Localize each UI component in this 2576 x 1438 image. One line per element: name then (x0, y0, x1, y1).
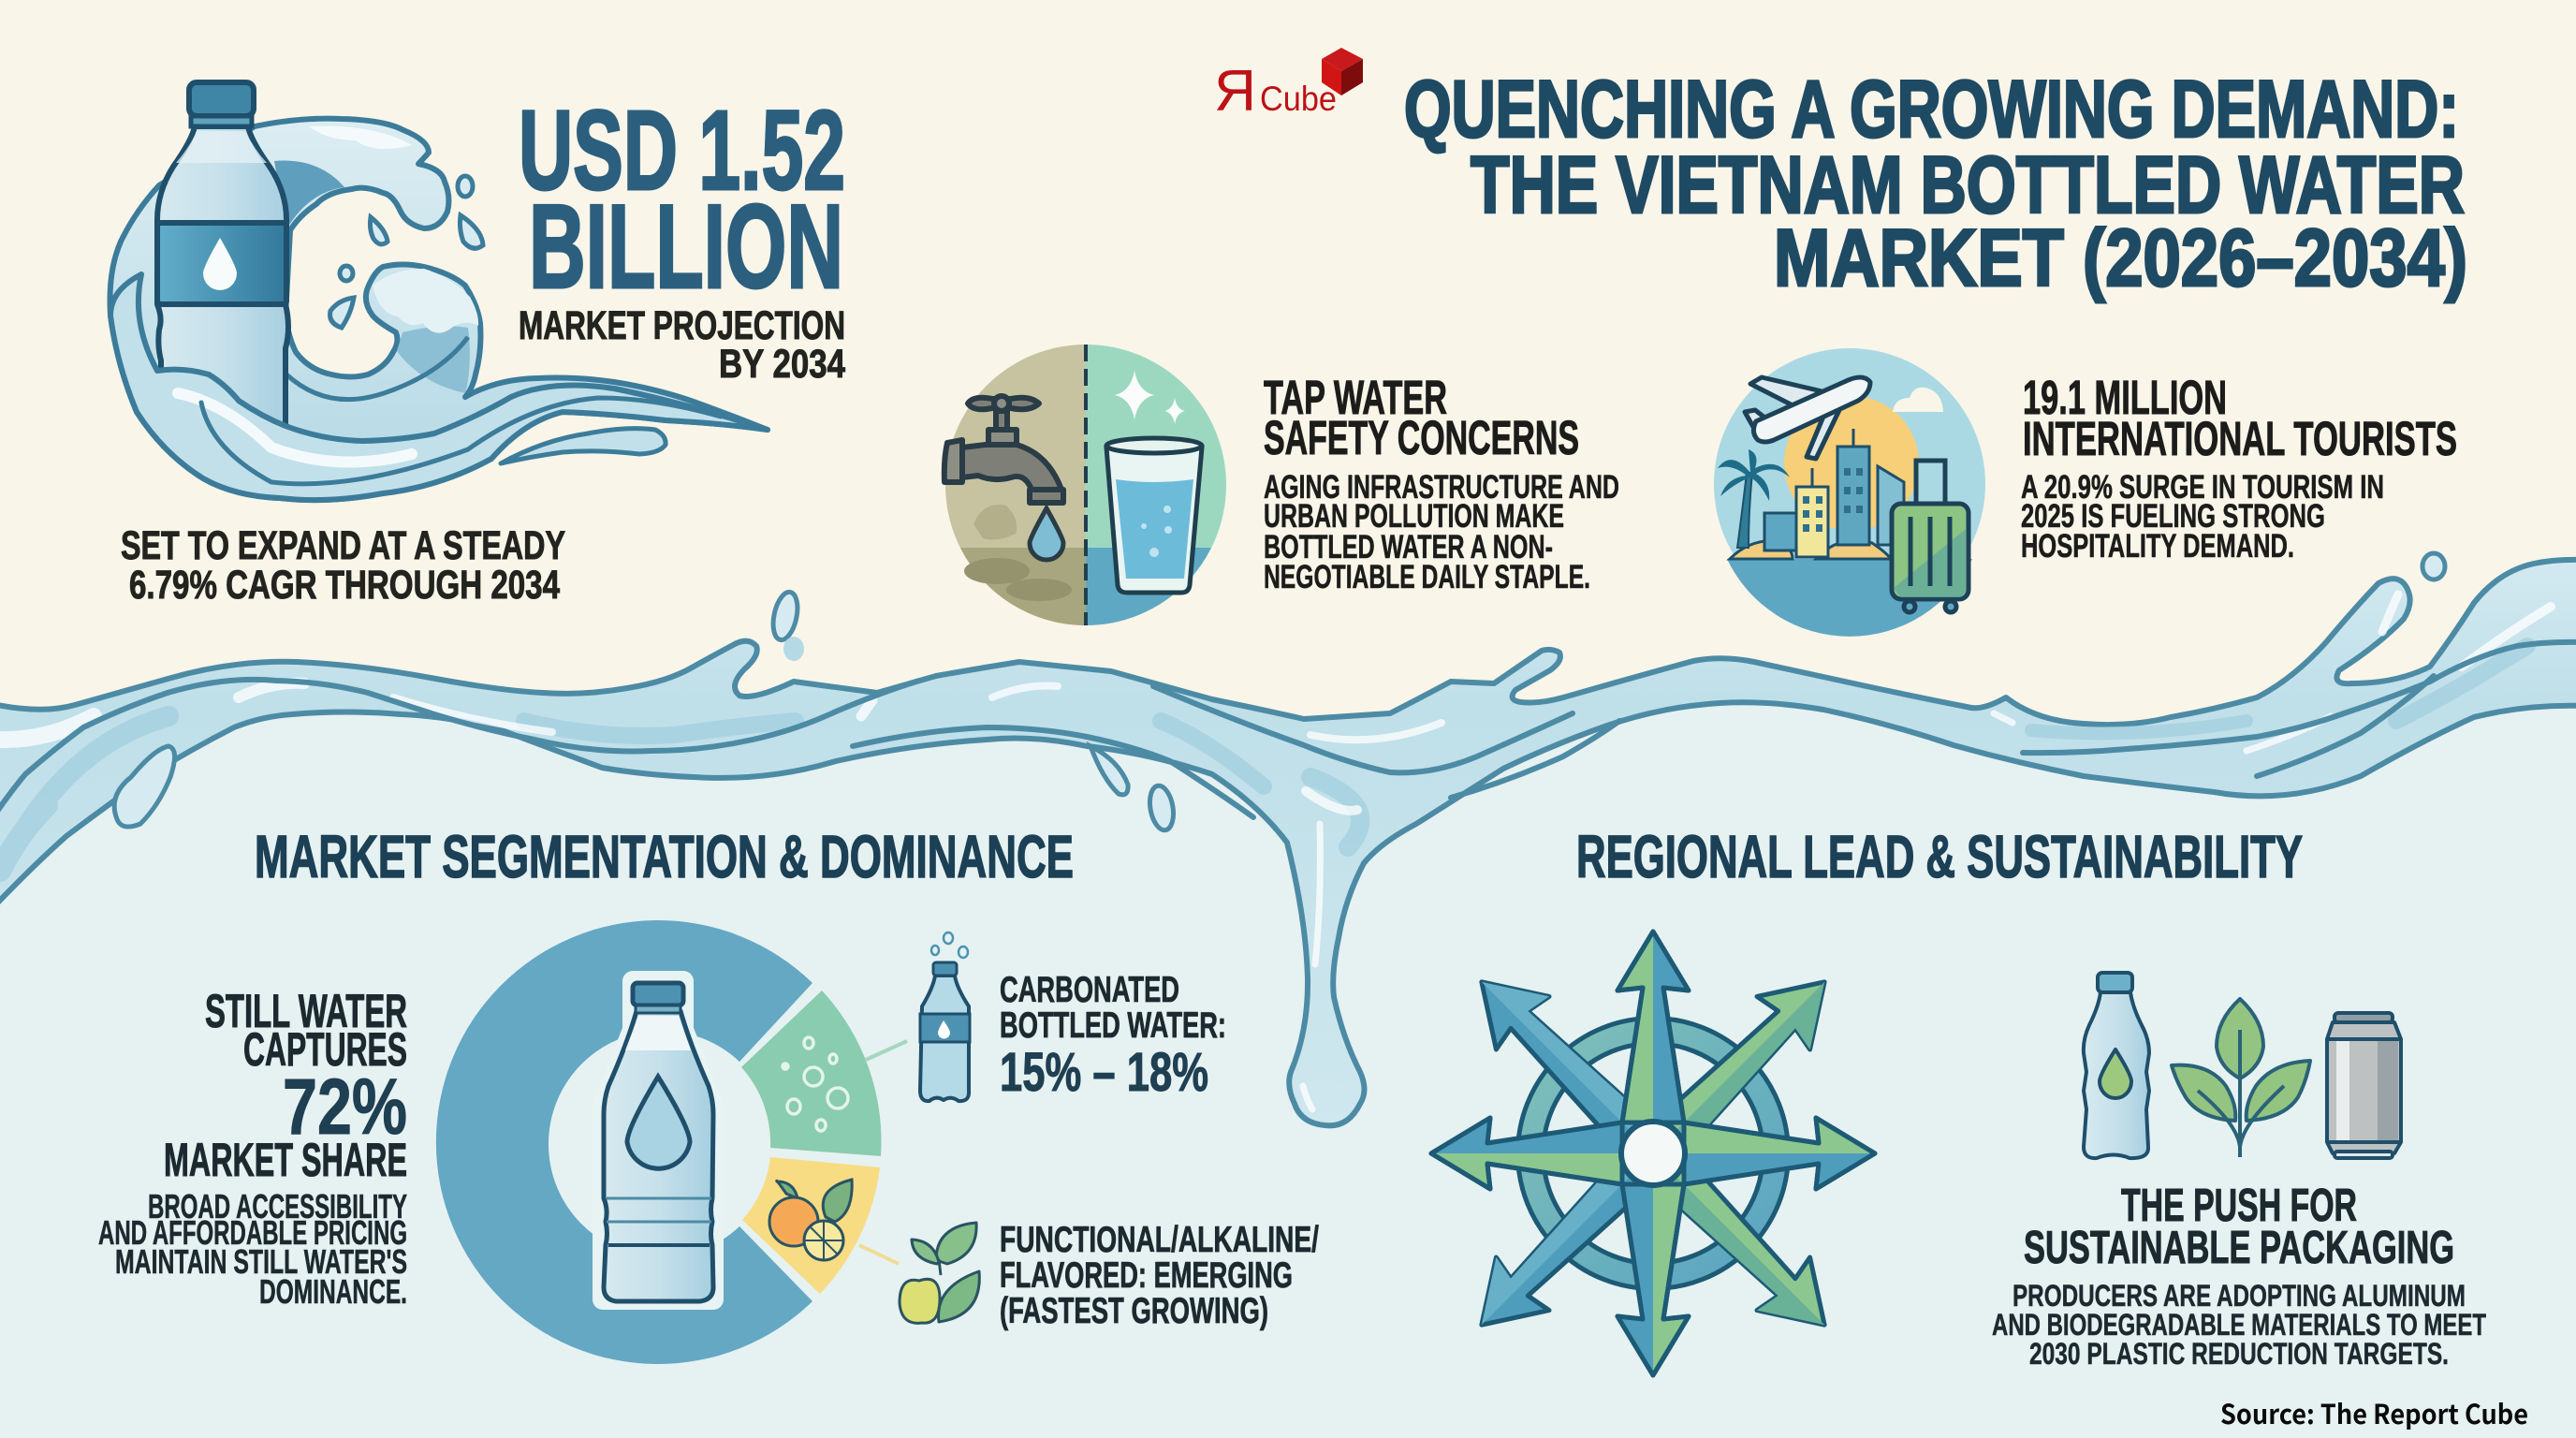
logo: RCube (1214, 48, 1363, 124)
blue lower right (1086, 548, 1211, 625)
carbonated label: CARBONATED (1000, 970, 1179, 1010)
stains (973, 505, 1017, 540)
text block: tap water safety (1264, 371, 1619, 595)
tap water body (1264, 469, 1619, 595)
tourists body: 2025 IS FUELING STRONG (2021, 498, 2325, 535)
icon: orange and lemon (769, 1180, 852, 1260)
tourists body: A 20.9% SURGE IN TOURISM IN (2021, 469, 2384, 506)
suitcase (1892, 461, 1969, 612)
darker water shading (0, 646, 2527, 871)
text block: functional segment: FLAVORED: EMERGING (1000, 1255, 1293, 1296)
stat value (519, 86, 845, 313)
compass hub (1621, 1122, 1685, 1185)
glass of water (1106, 438, 1202, 593)
plant sprout (2172, 999, 2310, 1157)
faucet (944, 396, 1063, 503)
splash droplets (329, 176, 483, 328)
72 percent: 72% (283, 1063, 407, 1151)
bottle label (157, 223, 286, 304)
central bottle halo (603, 981, 713, 1299)
tourists heading (2023, 371, 2457, 465)
logo cube icon (1322, 48, 1363, 95)
carbonated label (1000, 970, 1226, 1046)
bottle cap (189, 82, 254, 126)
water band body (0, 560, 2576, 1125)
windows (1803, 468, 1863, 532)
segment: functional (742, 1157, 880, 1294)
logo wordmark: Cube (1260, 80, 1337, 118)
stat value: BILLION (529, 180, 843, 313)
icon: leaves and apple (900, 1223, 979, 1323)
still water body (98, 1187, 407, 1311)
left hanging water loop (114, 746, 175, 827)
tourists body: HOSPITALITY DEMAND. (2021, 528, 2294, 565)
CAGR text (121, 523, 565, 608)
connector: carbonated (866, 1041, 907, 1060)
tap water body: URBAN POLLUTION MAKE (1264, 498, 1564, 535)
stat caption: BY 2034 (719, 342, 845, 387)
buildings (1764, 429, 1904, 557)
tap water body: AGING INFRASTRUCTURE AND (1264, 469, 1619, 506)
tap water body: NEGOTIABLE DAILY STAPLE. (1264, 559, 1590, 595)
packaging body: 2030 PLASTIC REDUCTION TARGETS. (2029, 1337, 2449, 1371)
sun (1784, 396, 1919, 531)
sea (1727, 559, 1972, 637)
dashed divider (1084, 345, 1088, 625)
stat caption (519, 303, 845, 387)
tap water heading (1264, 371, 1579, 464)
wave crescent (110, 119, 768, 500)
connector: functional (859, 1245, 899, 1264)
still water captures (205, 985, 407, 1076)
foreground wave details (178, 393, 721, 484)
tail splash (501, 429, 666, 463)
icon: tap water versus clean glass (944, 345, 1226, 625)
still water body: DOMINANCE. (259, 1272, 407, 1311)
central bottle (604, 983, 713, 1301)
still water captures: CAPTURES (243, 1023, 407, 1076)
wave inner shading (274, 126, 478, 400)
bottle body (157, 126, 288, 431)
text block: international tourists (2021, 371, 2457, 565)
CAGR text: SET TO EXPAND AT A STEADY (121, 523, 565, 568)
segment: carbonated (741, 990, 882, 1156)
text block: still water share (98, 985, 407, 1311)
left half of circle (945, 345, 1086, 625)
carbonated label: BOTTLED WATER: (1000, 1005, 1226, 1046)
logo wordmark (1214, 59, 1337, 124)
packaging body (1992, 1279, 2486, 1371)
falling tap drop (1030, 508, 1063, 560)
aluminium can (2327, 1013, 2401, 1158)
headline stat: USD 1.52 billion (519, 86, 845, 387)
tap water heading: SAFETY CONCERNS (1264, 411, 1579, 464)
source note: Source: The Report Cube (2220, 1393, 2528, 1432)
ground stains (964, 558, 1072, 601)
palm tree (1718, 449, 1790, 548)
icon: eight-way compass of arrows (1431, 932, 1875, 1375)
segment: still water 72% (436, 920, 812, 1364)
logo wordmark: Я (1214, 59, 1256, 124)
title (1404, 65, 2467, 303)
tap water heading: TAP WATER (1264, 371, 1447, 424)
tap water body: BOTTLED WATER A NON- (1264, 529, 1553, 565)
illustration: bottle with swirling wave (110, 82, 768, 500)
stained ground (960, 548, 1086, 625)
CAGR text: 6.79% CAGR THROUGH 2034 (129, 563, 560, 608)
water drops (769, 553, 2445, 832)
still water body: AND AFFORDABLE PRICING (98, 1213, 407, 1252)
water splash band across the page (0, 553, 2576, 1125)
ring (1530, 1031, 1776, 1276)
donut chart: market share (436, 920, 907, 1364)
tourists body (2021, 469, 2384, 565)
text block: functional segment: FUNCTIONAL/ALKALINE/ (1000, 1220, 1319, 1260)
cloud (1893, 388, 1943, 412)
stat caption: MARKET PROJECTION (519, 303, 845, 348)
bubbles (783, 1037, 848, 1131)
sand (1730, 540, 1891, 559)
stat value: USD 1.52 (519, 86, 845, 213)
inner water contour lines (0, 642, 2576, 817)
text block: functional segment (1000, 1220, 1319, 1331)
text block: sustainable packaging (1992, 1181, 2486, 1371)
still water captures: STILL WATER (205, 985, 407, 1037)
heading: market segmentation: MARKET SEGMENTATION & DOMINANCE (255, 823, 1074, 890)
bottle neck highlight (176, 131, 267, 163)
still water body: MAINTAIN STILL WATER'S (115, 1242, 407, 1281)
icon: sustainable packaging trio (2084, 973, 2401, 1158)
recyclable bottle (2084, 973, 2149, 1158)
icon: tourism scene (1714, 348, 1985, 637)
plane (1745, 377, 1870, 459)
text block: functional segment: (FASTEST GROWING) (1000, 1291, 1268, 1331)
packaging heading: THE PUSH FOR (2121, 1181, 2357, 1231)
tourists heading: 19.1 MILLION (2023, 371, 2227, 424)
still water body: BROAD ACCESSIBILITY (148, 1187, 407, 1225)
carbonated value: 15% – 18% (1000, 1042, 1208, 1103)
background: pale blue lower area (0, 702, 2576, 1438)
diagonal arrows (1456, 956, 1851, 1351)
market share label: MARKET SHARE (164, 1134, 407, 1186)
cardinal arrows (1431, 932, 1875, 1375)
packaging heading (2024, 1181, 2454, 1273)
text block: carbonated (1000, 970, 1226, 1103)
bottle label drop icon (203, 238, 237, 290)
right half of circle (1086, 345, 1226, 625)
white highlights on the water (0, 594, 2551, 1109)
icon: carbonated bottle (920, 932, 970, 1101)
sparkles (1115, 371, 1185, 424)
title: MARKET (2026–2034) (1774, 213, 2467, 303)
sky circle (1714, 348, 1985, 620)
foreground wave (110, 274, 768, 500)
